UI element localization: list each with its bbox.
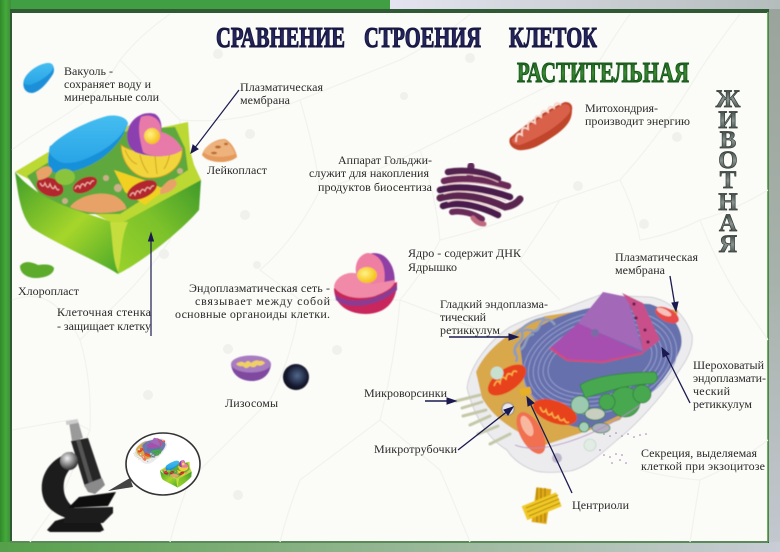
outer membrane bbox=[467, 295, 692, 472]
speech bubble with cells bbox=[108, 433, 200, 495]
text: chloroplast: Хлоропласт bbox=[18, 284, 80, 298]
text: rough ER: Шероховатый bbox=[693, 358, 765, 372]
heading: plant cell label: РАСТИТЕЛЬНАЯ bbox=[517, 57, 689, 89]
text: golgi apparatus: служит для накопления bbox=[309, 166, 429, 180]
right wall bbox=[118, 180, 201, 274]
text: vacuole: сохраняет воду и bbox=[64, 77, 152, 91]
arrow: cell wall bbox=[148, 233, 154, 336]
arrow: rough ER bbox=[662, 348, 690, 403]
leucoplasts & chloroplast bbox=[70, 194, 126, 213]
purple band bbox=[335, 284, 397, 306]
smooth ER bbox=[512, 318, 555, 362]
icon: lysosome sphere bbox=[283, 364, 309, 390]
arrow: microtubules bbox=[458, 407, 513, 450]
text: mitochondrion: Митохондрия- bbox=[585, 101, 658, 115]
heading: animal cell vertical label: Ж bbox=[716, 86, 741, 113]
text: rough ER: эндоплазмати- bbox=[693, 371, 766, 385]
base bbox=[47, 516, 104, 532]
stage bbox=[68, 492, 116, 508]
heading: animal cell vertical label: Т bbox=[720, 167, 737, 194]
text: smooth ER: ретиккулум bbox=[440, 323, 500, 337]
text: plant plasma membrane bbox=[240, 80, 323, 107]
icon: leucoplast bbox=[202, 139, 237, 162]
heading: animal cell vertical label: О bbox=[718, 147, 738, 174]
text: golgi apparatus: Аппарат Гольджи- bbox=[338, 153, 432, 167]
text: cell wall: - защищает клетку bbox=[57, 319, 151, 333]
arrow: microvilli bbox=[425, 398, 456, 404]
mitochondrion 2 bbox=[530, 394, 580, 430]
icon: chloroplast bbox=[20, 262, 54, 278]
text: microtubules: Микротрубочки bbox=[374, 442, 458, 456]
icon: vacuole bbox=[23, 63, 54, 93]
text: cell wall: Клеточная стенка bbox=[57, 305, 152, 319]
text: endoplasmic reticulum bbox=[175, 281, 331, 321]
mitochondrion 1 bbox=[483, 358, 531, 402]
text: smooth ER: тический bbox=[440, 310, 487, 324]
vesicles & centriole bbox=[490, 366, 504, 380]
golgi bbox=[571, 372, 657, 433]
rough ER bbox=[512, 295, 688, 429]
nucleus bbox=[127, 113, 182, 156]
mini plant cell bbox=[160, 460, 192, 488]
cut face bbox=[334, 273, 395, 298]
icon: centriole bbox=[522, 487, 562, 524]
microscope bbox=[42, 419, 116, 532]
microvilli bbox=[456, 395, 510, 444]
title: СТРОЕНИЯ bbox=[364, 22, 481, 54]
text: secretion: Секреция, выделяемая bbox=[641, 446, 757, 460]
text: mitochondrion: производит энергию bbox=[585, 114, 690, 128]
text: microvilli: Микроворсинки bbox=[364, 386, 448, 400]
secretion dots bbox=[599, 432, 647, 464]
text: smooth ER bbox=[440, 297, 548, 337]
arrow: centrioles bbox=[527, 397, 572, 493]
title: СРАВНЕНИЕ bbox=[216, 22, 345, 54]
heading: animal cell vertical label bbox=[716, 86, 741, 258]
icon: lysosome bowl bbox=[231, 356, 271, 381]
text: lysosomes: Лизосомы bbox=[225, 396, 278, 410]
heading: animal cell vertical label: В bbox=[720, 127, 736, 154]
text: animal plasma membrane: Плазматическая bbox=[615, 250, 698, 264]
red organelle bbox=[652, 303, 682, 327]
objective bbox=[84, 478, 105, 494]
icon: nucleus bbox=[334, 253, 397, 314]
arrow: plant plasma membrane bbox=[191, 90, 239, 153]
text: vacuole: минеральные соли bbox=[64, 90, 160, 104]
icon: mitochondrion bbox=[509, 102, 572, 150]
heading: animal cell vertical label: Я bbox=[719, 231, 737, 258]
text: vacuole: Вакуоль - bbox=[64, 64, 113, 78]
text: golgi apparatus: продуктов биосентиза bbox=[318, 180, 433, 194]
nucleus bbox=[550, 292, 660, 362]
text: vacuole bbox=[64, 64, 160, 104]
text: cell wall bbox=[57, 305, 152, 333]
text: leucoplast: Лейкопласт bbox=[207, 163, 268, 177]
cytoplasm bbox=[476, 305, 678, 445]
mitochondrion 3 bbox=[510, 408, 552, 458]
text: endoplasmic reticulum: связывает между собой bbox=[195, 294, 331, 308]
interior floor bbox=[27, 127, 188, 214]
text: rough ER: ретиккулум bbox=[693, 397, 752, 411]
text: rough ER: ческий bbox=[693, 384, 731, 398]
vacuole bbox=[48, 123, 128, 173]
tube bbox=[71, 438, 102, 487]
dome bbox=[356, 253, 395, 290]
plant cell diagram bbox=[15, 113, 201, 274]
heading: animal cell vertical label: Н bbox=[718, 189, 738, 216]
heading: animal cell vertical label: А bbox=[719, 210, 737, 237]
text: secretion bbox=[641, 446, 765, 473]
ER bbox=[121, 145, 182, 178]
heading: animal cell vertical label: И bbox=[718, 107, 738, 134]
text: plant plasma membrane: Плазматическая bbox=[240, 80, 323, 94]
bowl bbox=[334, 282, 397, 314]
arrow: animal plasma membrane bbox=[670, 276, 678, 311]
text: animal plasma membrane: мембрана bbox=[615, 263, 666, 277]
text: nucleus: Ядрышко bbox=[408, 260, 457, 274]
text: endoplasmic reticulum: основные органоиды клетки. bbox=[175, 307, 330, 321]
mini animal cell bbox=[133, 438, 167, 464]
mitochondria bbox=[34, 174, 66, 200]
animal cell diagram bbox=[456, 292, 692, 472]
text: nucleus: Ядро - содержит ДНК bbox=[408, 246, 522, 260]
text: rough ER bbox=[693, 358, 766, 411]
text: endoplasmic reticulum: Эндоплазматическая сеть - bbox=[189, 281, 330, 295]
title: КЛЕТОК bbox=[509, 22, 597, 54]
text: nucleus bbox=[408, 246, 522, 274]
text: mitochondrion bbox=[585, 101, 690, 128]
text: centrioles: Центриоли bbox=[572, 498, 630, 512]
text: plant plasma membrane: мембрана bbox=[240, 93, 291, 107]
text: secretion: клеткой при экзоцитозе bbox=[641, 459, 765, 473]
rim bbox=[15, 122, 201, 226]
focus knob bbox=[60, 452, 78, 470]
arm bbox=[42, 452, 82, 518]
text: smooth ER: Гладкий эндоплазма- bbox=[440, 297, 548, 311]
title bbox=[216, 22, 597, 54]
arrow: smooth ER bbox=[449, 334, 518, 340]
eyepiece bbox=[69, 421, 83, 441]
left wall bbox=[15, 172, 118, 274]
icon: golgi apparatus bbox=[440, 166, 520, 224]
text: golgi apparatus bbox=[309, 153, 433, 194]
text: animal plasma membrane bbox=[615, 250, 698, 277]
